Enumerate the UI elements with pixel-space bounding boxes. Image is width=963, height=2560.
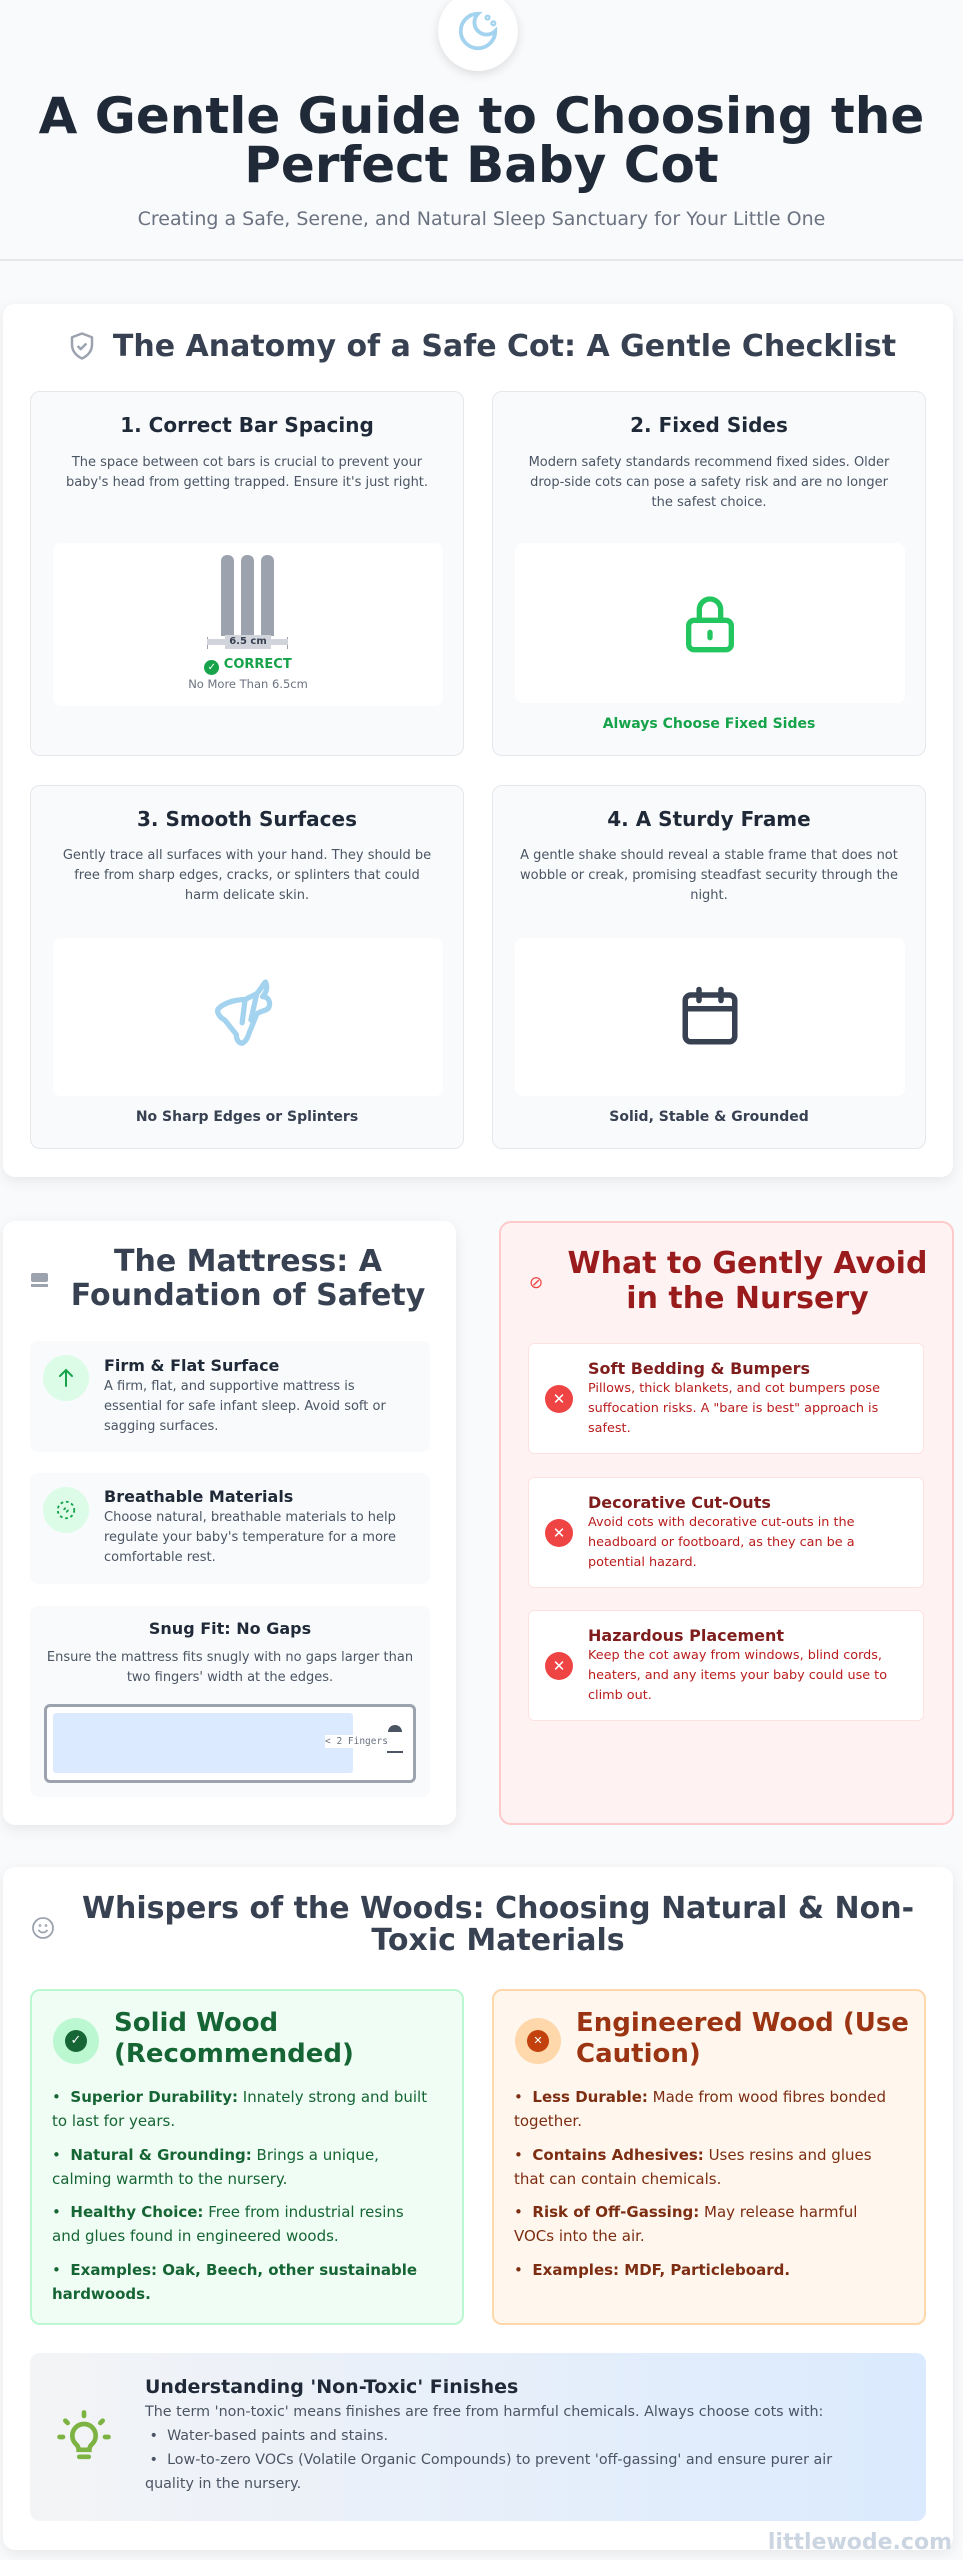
illustration: cot bars: CORRECT [224,657,292,672]
item: snug fit: Snug Fit: No Gaps [149,1619,311,1638]
item: breathable: Choose natural, breathable materials to help regulate your baby's temperature for a more comfortable rest. [104,1510,396,1565]
box: solid wood: • Healthy Choice: Free from industrial resins and glues found in engineered woods. [52,2203,404,2245]
panel: materials [3,1867,953,2550]
icon: moon badge [438,0,518,71]
box: solid wood: • Superior Durability: Innately strong and built to last for years. [52,2088,427,2130]
illustration: cot bars: No More Than 6.5cm [188,677,308,691]
card: sturdy frame: Solid, Stable & Grounded [609,1109,809,1125]
item: snug fit [30,1606,430,1797]
avoid item: cut-outs: ✕ [553,1524,565,1542]
diagram: mattress gap [44,1704,416,1783]
box: solid wood: Solid Wood [114,2008,278,2038]
callout: non-toxic finishes [30,2353,926,2521]
illustration: cot bars: 6.5 cm [229,636,267,647]
box: solid wood: • Examples: Oak, Beech, other sustainable hardwoods. [52,2260,417,2302]
subtitle: Creating a Safe, Serene, and Natural Sleep Sanctuary for Your Little One [138,208,825,230]
card: smooth surfaces [30,785,464,1149]
avoid item: soft bedding: Pillows, thick blankets, and cot bumpers pose suffocation risks. A "bare is best" approach is safest. [588,1381,880,1436]
box: solid wood: • Natural & Grounding: Brings a unique, calming warmth to the nursery. [52,2146,379,2188]
callout: non-toxic finishes: • Water-based paints and stains. [150,2428,388,2444]
box: solid wood: (Recommended) [114,2039,354,2069]
illustration: cot bars [53,543,443,706]
item: firm surface: A firm, flat, and supportive mattress is essential for safe infant sleep. Avoid soft or sagging surfaces. [104,1379,386,1434]
icon: laptop [31,1273,48,1287]
item: breathable [30,1473,430,1584]
icon: hand [53,938,443,1096]
avoid item: soft bedding: ✕ [553,1390,565,1408]
callout: non-toxic finishes: The term 'non-toxic' means finishes are free from harmful chemicals. Always choose cots with: [145,2404,823,2420]
panel: anatomy checklist [3,304,953,1177]
box: engineered wood: • Less Durable: Made from wood fibres bonded together. [514,2088,886,2130]
callout: non-toxic finishes: • Low-to-zero VOCs (Volatile Organic Compounds) to prevent 'off-gassing' and ensure purer air quality in the nursery. [145,2452,832,2492]
card: bar spacing [30,391,464,756]
card: fixed sides: Always Choose Fixed Sides [603,716,815,732]
card: bar spacing: 1. Correct Bar Spacing [120,413,374,437]
heading: avoid: What to Gently Avoid [568,1246,927,1281]
card: bar spacing: The space between cot bars is crucial to prevent your baby's head from getting trapped. Ensure it's just right. [66,455,428,490]
callout: non-toxic finishes: Understanding 'Non-Toxic' Finishes [145,2376,518,2398]
card: sturdy frame: A gentle shake should reveal a stable frame that does not wobble or creak, promising steadfast security through the night. [520,848,898,903]
icon: lightbulb [57,2410,111,2460]
item: snug fit: Ensure the mattress fits snugly with no gaps larger than two fingers' width at the edges. [47,1650,413,1685]
title: A Gentle Guide to Choosing the [39,87,924,145]
box: engineered wood [492,1989,926,2325]
icon: lock [515,543,905,703]
card: smooth surfaces: 3. Smooth Surfaces [137,807,357,831]
heading: anatomy: The Anatomy of a Safe Cot: A Gentle Checklist [113,328,896,364]
diagram: mattress gap: < 2 Fingers [325,1736,388,1747]
card: sturdy frame [492,785,926,1149]
panel: mattress [3,1221,456,1825]
title: Perfect Baby Cot [244,136,719,194]
item: breathable: Breathable Materials [104,1487,293,1506]
avoid item: cut-outs: Decorative Cut-Outs [588,1493,771,1512]
box: solid wood: ✓ [71,2033,81,2048]
box: engineered wood: • Risk of Off-Gassing: May release harmful VOCs into the air. [514,2203,857,2245]
heading: materials: Whispers of the Woods: Choosing Natural & Non-Toxic Materials [82,1891,914,1958]
card: fixed sides: 2. Fixed Sides [630,413,788,437]
avoid item: cut-outs [528,1477,924,1588]
box: solid wood [30,1989,464,2325]
heading: avoid: in the Nursery [626,1281,869,1316]
item: firm surface [30,1341,430,1452]
avoid item: soft bedding: Soft Bedding & Bumpers [588,1359,810,1378]
box: engineered wood: Engineered Wood (Use Caution) [576,2008,909,2069]
card: sturdy frame: 4. A Sturdy Frame [607,807,811,831]
avoid item: placement: Keep the cot away from windows, blind cords, heaters, and any items your baby could use to climb out. [588,1648,887,1703]
watermark: littlewode.com [768,2530,952,2555]
avoid item: placement: Hazardous Placement [588,1626,784,1645]
card: fixed sides: Modern safety standards recommend fixed sides. Older drop-side cots can pose a safety risk and are no longer the safest choice. [529,455,889,510]
card: smooth surfaces: Gently trace all surfaces with your hand. They should be free from sharp edges, cracks, or splinters that could harm delicate skin. [63,848,431,903]
icon: smiley [32,1917,54,1939]
box: engineered wood: ✕ [533,2034,543,2047]
avoid item: soft bedding [528,1343,924,1454]
item: firm surface: Firm & Flat Surface [104,1356,279,1375]
avoid item: placement [528,1610,924,1721]
box: engineered wood: • Examples: MDF, Particleboard. [514,2260,790,2278]
heading: mattress: The Mattress: A Foundation of Safety [71,1244,425,1313]
heading: avoid [568,1246,927,1316]
illustration: cot bars: ✓ [208,662,216,673]
title [38,87,924,194]
icon: calendar [515,938,905,1096]
panel: what to avoid [499,1221,954,1825]
icon: prohibited: ⊘ [529,1273,543,1293]
card: fixed sides [492,391,926,756]
avoid item: placement: ✕ [553,1657,565,1675]
card: smooth surfaces: No Sharp Edges or Splinters [136,1109,358,1125]
box: engineered wood: • Contains Adhesives: Uses resins and glues that can contain chemicals. [514,2146,872,2188]
avoid item: cut-outs: Avoid cots with decorative cut-outs in the headboard or footboard, as they can be a potential hazard. [588,1515,855,1570]
